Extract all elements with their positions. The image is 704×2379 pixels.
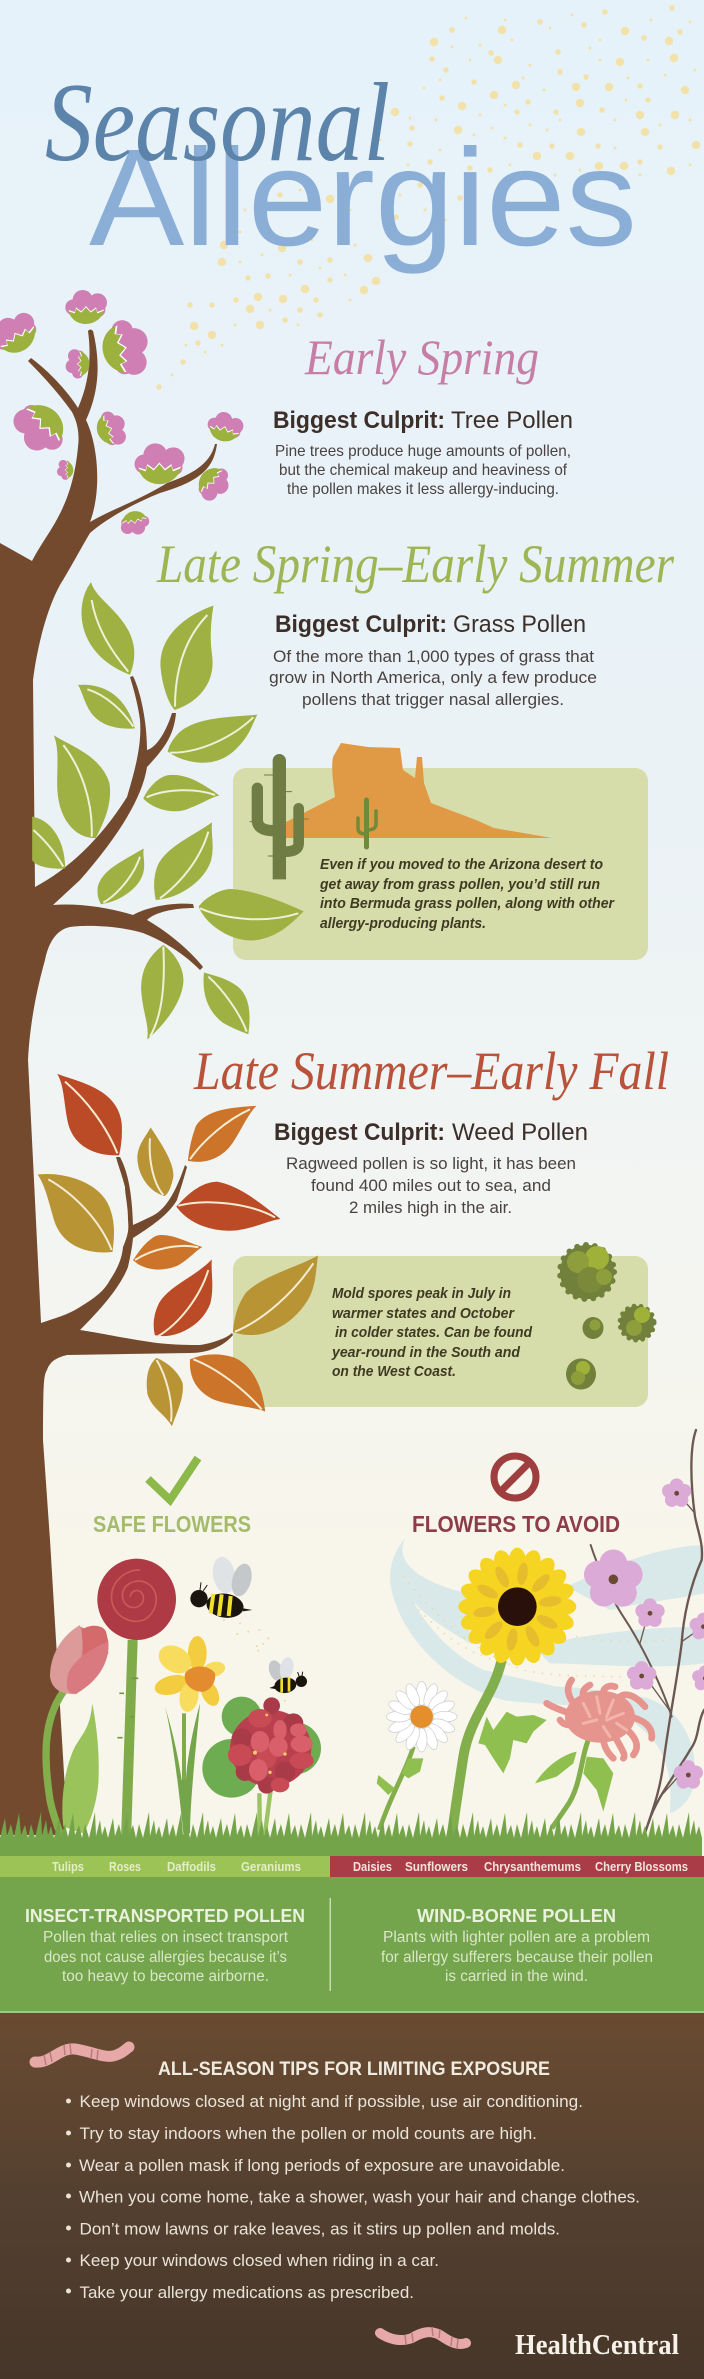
section: late summer text bbox=[193, 1041, 669, 1217]
icon: large mold spore bbox=[560, 1245, 614, 1299]
description bbox=[286, 1154, 576, 1217]
column: wind borne: Plants with lighter pollen are a problem bbox=[383, 1929, 650, 1946]
tips heading: ALL-SEASON TIPS FOR LIMITING EXPOSURE bbox=[158, 2059, 550, 2080]
card background bbox=[233, 768, 648, 960]
tips list: Keep windows closed at night and if possible, use air conditioning. bbox=[80, 2092, 583, 2111]
bee one bbox=[190, 1555, 255, 1620]
sunflower bbox=[452, 1548, 576, 1837]
card text: on the West Coast. bbox=[332, 1363, 456, 1380]
column: insect transported: Pollen that relies on insect transport bbox=[43, 1929, 289, 1946]
stem and leaves bbox=[552, 1730, 593, 1828]
icon: worm bbox=[35, 2044, 129, 2065]
panel: pollen types bbox=[0, 1877, 704, 2013]
bar: avoid names: Daisies bbox=[353, 1859, 392, 1874]
grass bbox=[0, 1812, 702, 1857]
icon: small cactus bbox=[358, 800, 376, 847]
column: wind borne: is carried in the wind. bbox=[445, 1968, 588, 1985]
section: early spring text bbox=[273, 329, 573, 498]
safe flowers illustrations bbox=[46, 1555, 321, 1847]
panel background bbox=[0, 2013, 704, 2379]
section: late spring text bbox=[156, 534, 675, 709]
bar: safe names: Tulips bbox=[52, 1859, 84, 1874]
bar: safe names: Roses bbox=[109, 1859, 141, 1874]
tips list: Wear a pollen mask if long periods of exposure are unavoidable. bbox=[79, 2156, 565, 2175]
culprit value: Grass Pollen bbox=[453, 611, 586, 638]
icon: medium mold spore bbox=[620, 1306, 654, 1340]
tree trunk and branches bbox=[0, 330, 233, 1835]
panel: all-season tips bbox=[0, 2013, 704, 2379]
pollen dust cloud bbox=[159, 8, 696, 387]
stem and leaves bbox=[379, 1747, 413, 1830]
geranium bbox=[202, 1697, 321, 1840]
icon: worm bbox=[380, 2327, 466, 2348]
tips list: Try to stay indoors when the pollen or mold counts are high. bbox=[80, 2124, 537, 2143]
column: insect transported: too heavy to become airborne. bbox=[62, 1968, 269, 1985]
icon: check mark bbox=[148, 1458, 198, 1500]
summer leaves bbox=[33, 585, 302, 1037]
branch: cherry bbox=[591, 1430, 704, 1838]
bar: safe names: Daffodils bbox=[167, 1859, 216, 1874]
flowers to avoid heading bbox=[412, 1456, 620, 1537]
tips list: Don’t mow lawns or rake leaves, as it stirs up pollen and molds. bbox=[80, 2220, 560, 2238]
tips list: Keep your windows closed when riding in a car. bbox=[80, 2251, 439, 2270]
spring blossoms bbox=[0, 290, 246, 537]
bar: safe names: Geraniums bbox=[241, 1859, 301, 1874]
label: safe flowers: SAFE FLOWERS bbox=[93, 1511, 251, 1537]
card text: year-round in the South and bbox=[331, 1344, 521, 1361]
card text: in colder states. Can be found bbox=[335, 1324, 533, 1341]
autumn leaves bbox=[39, 1076, 317, 1424]
safe flowers heading bbox=[93, 1458, 251, 1537]
column: wind borne: for allergy sufferers because their pollen bbox=[381, 1949, 653, 1966]
flower name bars bbox=[0, 1856, 704, 1877]
icon: small mold spore bbox=[582, 1317, 604, 1339]
culprit value: Weed Pollen bbox=[452, 1119, 588, 1146]
bee two bbox=[266, 1656, 307, 1694]
culprit label: Biggest Culprit: bbox=[273, 407, 445, 434]
card background bbox=[233, 1256, 648, 1407]
title word: Allergies: Allergies bbox=[89, 121, 637, 275]
bar: safe names bbox=[0, 1856, 330, 1877]
column: insect transported bbox=[25, 1906, 305, 1985]
title bbox=[45, 61, 637, 275]
card text: get away from grass pollen, you’d still run bbox=[319, 876, 600, 893]
wind pollen specks bbox=[403, 1577, 697, 1680]
panel background bbox=[0, 1877, 704, 2013]
tips list: Take your allergy medications as prescribed. bbox=[80, 2283, 414, 2302]
culprit label: Biggest Culprit: bbox=[275, 611, 447, 638]
daffodil bbox=[153, 1636, 227, 1833]
description: the pollen makes it less allergy-inducing. bbox=[287, 481, 559, 498]
logo: healthcentral: HealthCentral bbox=[515, 2330, 679, 2361]
tulip bbox=[46, 1625, 109, 1847]
bar: avoid names: Chrysanthemums bbox=[484, 1859, 581, 1874]
card: arizona desert bbox=[233, 743, 648, 960]
tips list bbox=[66, 2092, 640, 2302]
column: wind borne bbox=[381, 1906, 653, 1985]
blossoms: cherry bbox=[584, 1478, 704, 1789]
rose bbox=[97, 1559, 176, 1840]
column: wind borne: WIND-BORNE POLLEN bbox=[417, 1906, 616, 1926]
description: Of the more than 1,000 types of grass that bbox=[273, 647, 594, 666]
culprit label: Biggest Culprit: bbox=[274, 1119, 445, 1146]
wind and avoid flowers bbox=[377, 1430, 704, 1838]
description: grow in North America, only a few produce bbox=[269, 668, 597, 687]
falling pollen from bee bbox=[224, 1620, 285, 1701]
column: insect transported: INSECT-TRANSPORTED POLLEN bbox=[25, 1906, 305, 1926]
card text: Mold spores peak in July in bbox=[332, 1285, 511, 1302]
title word: Seasonal: Seasonal bbox=[45, 61, 390, 185]
card text: Even if you moved to the Arizona desert to bbox=[320, 856, 603, 873]
flower head bbox=[386, 1681, 457, 1752]
chrysanthemum bbox=[535, 1680, 652, 1828]
card text: allergy-producing plants. bbox=[320, 915, 486, 932]
icon: lower mold spore bbox=[566, 1358, 596, 1390]
card text bbox=[331, 1285, 533, 1380]
description: Ragweed pollen is so light, it has been bbox=[286, 1154, 576, 1173]
flower head bbox=[458, 1548, 576, 1666]
flower head bbox=[547, 1680, 652, 1758]
description: pollens that trigger nasal allergies. bbox=[302, 690, 564, 709]
icon: prohibition sign bbox=[494, 1456, 536, 1498]
bar: avoid names: Sunflowers bbox=[405, 1859, 468, 1874]
description: Pine trees produce huge amounts of pollen, bbox=[275, 443, 571, 460]
card text: warmer states and October bbox=[332, 1305, 515, 1322]
daisy bbox=[377, 1681, 457, 1830]
card text: into Bermuda grass pollen, along with other bbox=[320, 895, 615, 912]
icon: desert mesa bbox=[284, 743, 552, 838]
label: flowers to avoid: FLOWERS TO AVOID bbox=[412, 1511, 620, 1537]
wind swoosh bbox=[390, 1538, 704, 1813]
description: but the chemical makeup and heaviness of bbox=[279, 462, 568, 479]
description: 2 miles high in the air. bbox=[349, 1198, 512, 1217]
bar: avoid names bbox=[330, 1856, 704, 1877]
column: insect transported: does not cause allergies because it’s bbox=[44, 1949, 287, 1966]
stem and leaf bbox=[452, 1660, 502, 1837]
description: found 400 miles out to sea, and bbox=[311, 1176, 551, 1195]
card: mold spores bbox=[233, 1245, 654, 1407]
heading: early spring: Early Spring bbox=[304, 329, 539, 385]
culprit value: Tree Pollen bbox=[451, 407, 573, 434]
card text bbox=[319, 856, 615, 932]
description bbox=[275, 443, 571, 498]
icon: large cactus bbox=[250, 754, 308, 879]
description bbox=[269, 647, 597, 709]
tips list: When you come home, take a shower, wash your hair and change clothes. bbox=[79, 2188, 640, 2206]
bar: avoid names: Cherry Blossoms bbox=[595, 1859, 688, 1874]
